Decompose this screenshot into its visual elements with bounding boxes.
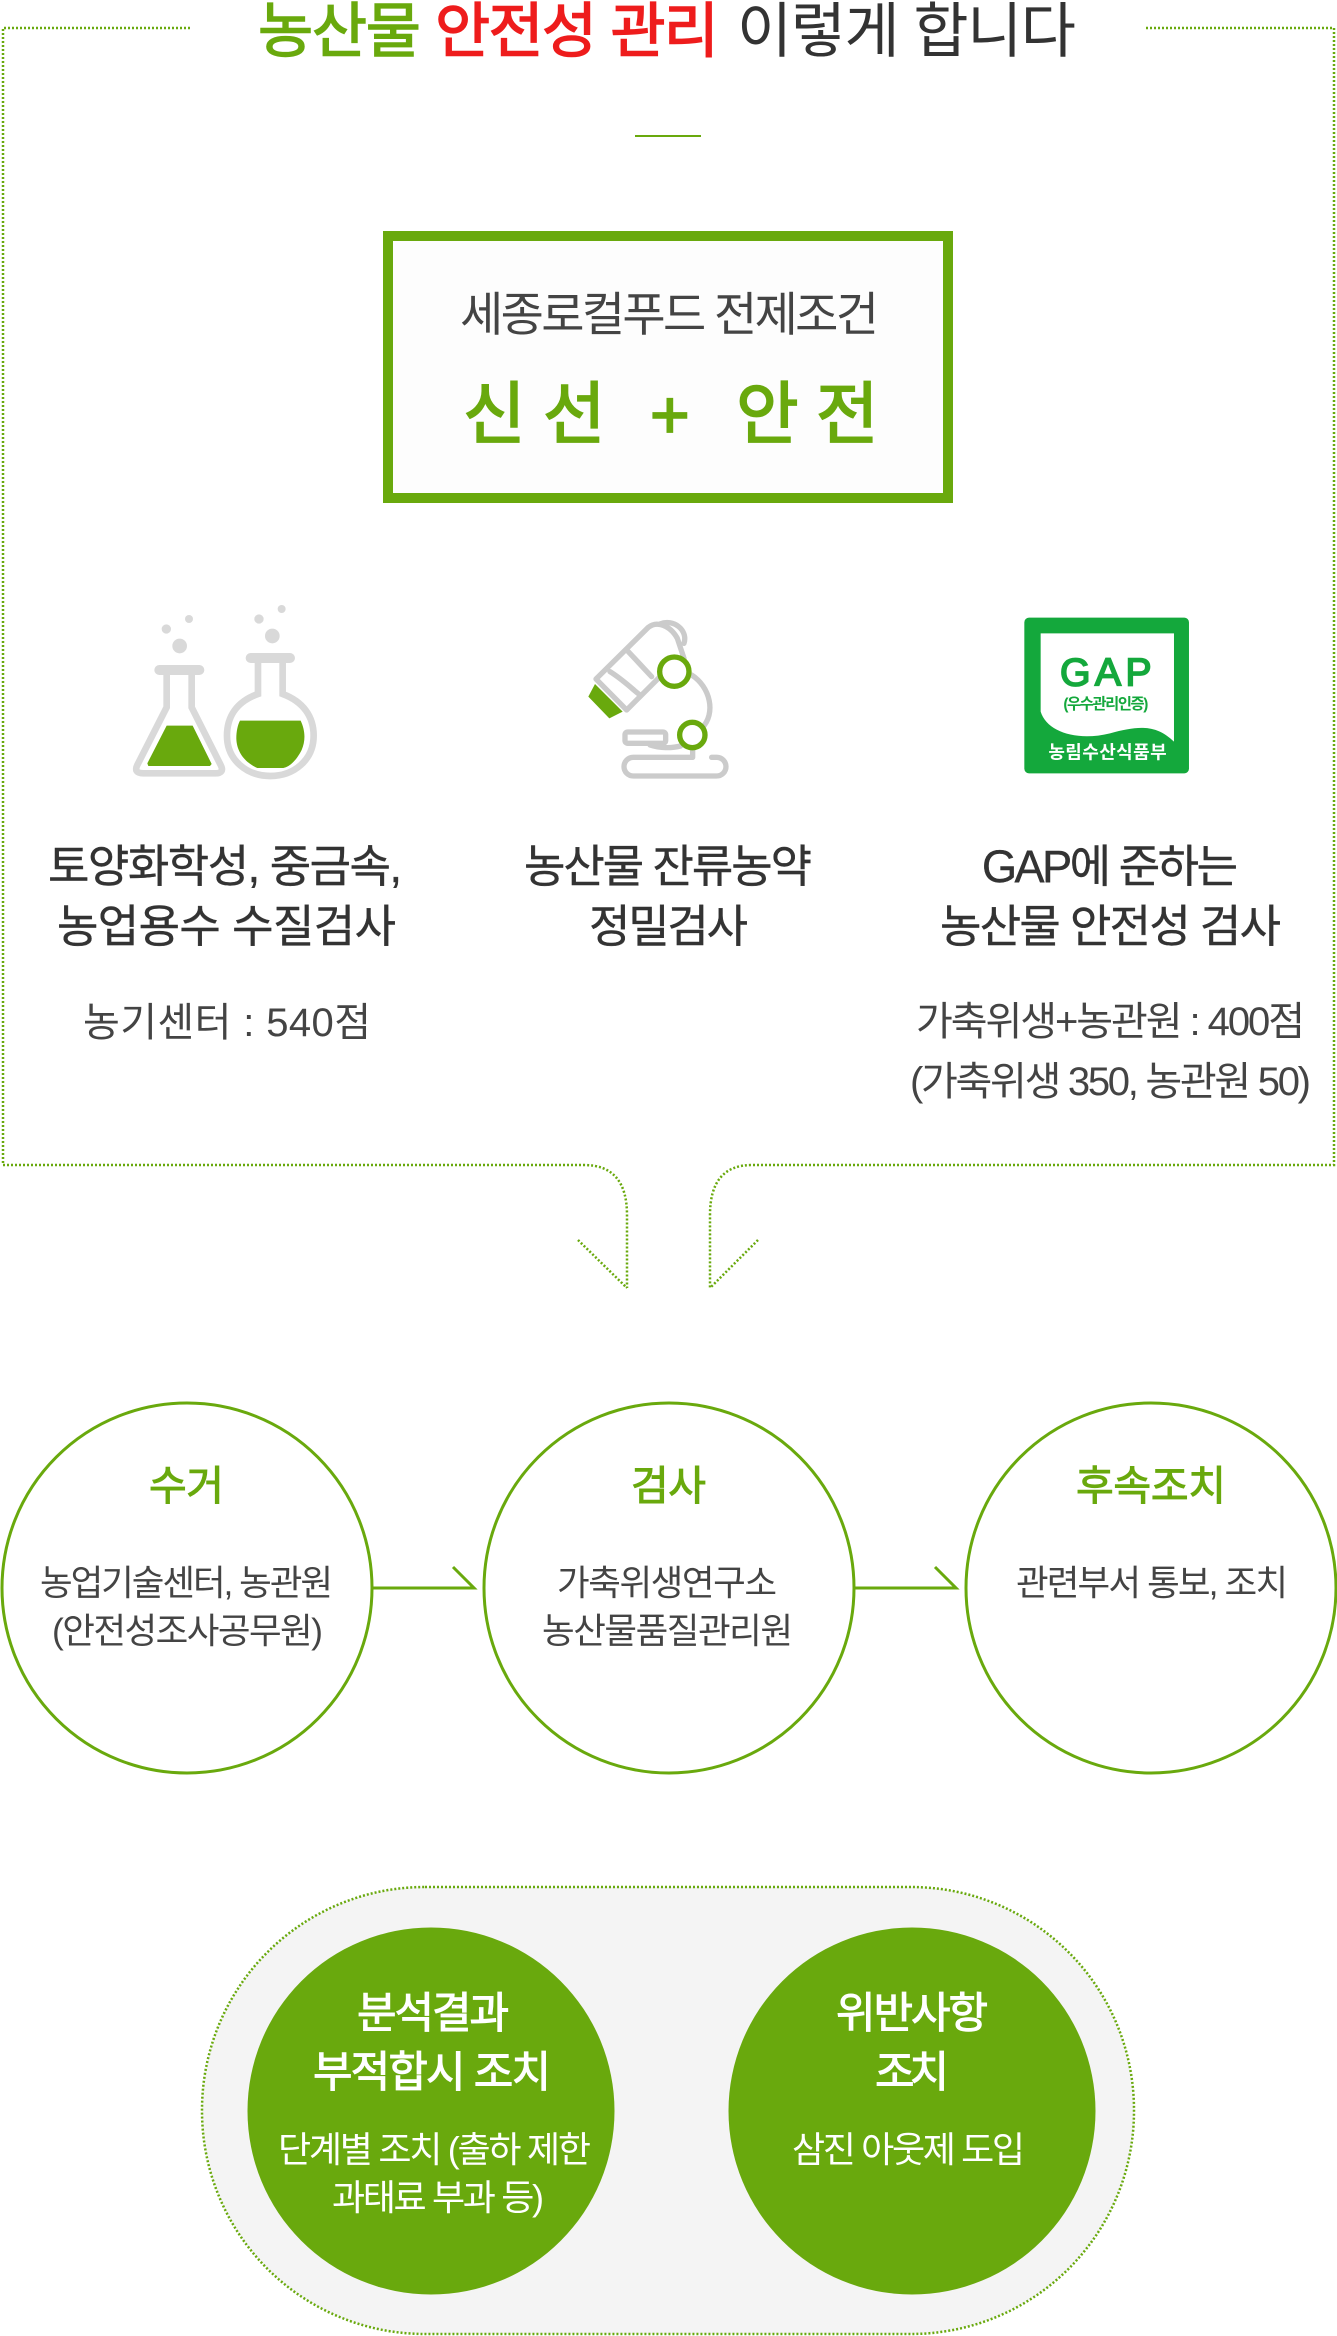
circle: collection: 농업기술센터, 농관원 bbox=[40, 1563, 333, 1603]
text block: residue tests bbox=[524, 841, 812, 952]
text block: GAP tests: 가축위생+농관원 : 400점 bbox=[916, 1000, 1305, 1044]
circle: non-conforming results: 분석결과 bbox=[357, 1990, 509, 2038]
panel: actions pill bbox=[202, 1887, 1134, 2334]
icon: microscope bbox=[588, 623, 726, 776]
icon: flasks bbox=[136, 605, 314, 776]
text block: residue tests: 농산물 잔류농약 bbox=[524, 841, 812, 892]
circle: follow-up bbox=[966, 1403, 1336, 1773]
text block: GAP tests: 농산물 안전성 검사 bbox=[940, 901, 1281, 952]
circle: non-conforming results: 부적합시 조치 bbox=[313, 2049, 551, 2097]
arrow bbox=[372, 1567, 474, 1588]
circle: follow-up: 후속조치 bbox=[1076, 1463, 1226, 1509]
title bbox=[258, 0, 1076, 65]
box headline: 신 bbox=[463, 377, 526, 453]
box headline: 안 bbox=[736, 377, 799, 453]
text block: soil and water tests: 농기센터 : 540점 bbox=[83, 1001, 371, 1045]
text block: soil and water tests: 토양화학성, 중금속, bbox=[48, 841, 402, 892]
dotted frame with two arrows bbox=[3, 28, 1334, 1288]
circle: collection bbox=[2, 1403, 372, 1773]
title: 안전성 관리 bbox=[435, 0, 719, 65]
icon: GAP badge: (우수관리인증) bbox=[1063, 696, 1148, 713]
circle: non-conforming results: 단계별 조치 (출하 제한 bbox=[278, 2129, 591, 2170]
icon: GAP badge bbox=[1024, 618, 1189, 773]
circle: collection: (안전성조사공무원) bbox=[52, 1611, 323, 1651]
box headline: 선 bbox=[543, 377, 606, 453]
circle: inspection: 농산물품질관리원 bbox=[542, 1611, 793, 1651]
text block: soil and water tests bbox=[48, 841, 402, 1045]
circle: non-conforming results bbox=[248, 1928, 614, 2294]
box caption: 세종로컬푸드 전제조건 bbox=[460, 288, 879, 341]
text block: GAP tests: (가축위생 350, 농관원 50) bbox=[910, 1060, 1311, 1104]
circle: violations: 위반사항 bbox=[836, 1990, 988, 2038]
icon: GAP badge: GAP bbox=[1060, 651, 1152, 695]
arrow bbox=[854, 1567, 956, 1588]
text block: soil and water tests: 농업용수 수질검사 bbox=[57, 901, 396, 952]
circle: follow-up: 관련부서 통보, 조치 bbox=[1016, 1563, 1288, 1603]
circle: violations bbox=[728, 1928, 1096, 2294]
circle: violations: 조치 bbox=[875, 2049, 949, 2097]
title: 농산물 bbox=[258, 0, 421, 65]
text block: GAP tests bbox=[910, 841, 1311, 1104]
text block: residue tests: 정밀검사 bbox=[589, 901, 748, 952]
circle: inspection bbox=[484, 1403, 854, 1773]
circle: inspection: 검사 bbox=[631, 1463, 706, 1509]
circle: inspection: 가축위생연구소 bbox=[557, 1563, 777, 1603]
title: 이렇게 합니다 bbox=[737, 0, 1076, 65]
circle: non-conforming results: 과태료 부과 등) bbox=[332, 2177, 544, 2218]
box headline: + bbox=[650, 377, 690, 453]
circle: collection: 수거 bbox=[149, 1463, 224, 1509]
box headline: 전 bbox=[816, 377, 879, 453]
text block: GAP tests: GAP에 준하는 bbox=[982, 841, 1238, 892]
circle: violations: 삼진 아웃제 도입 bbox=[792, 2129, 1025, 2170]
panel: precondition box bbox=[388, 236, 948, 498]
icon: GAP badge: 농림수산식품부 bbox=[1048, 742, 1167, 762]
